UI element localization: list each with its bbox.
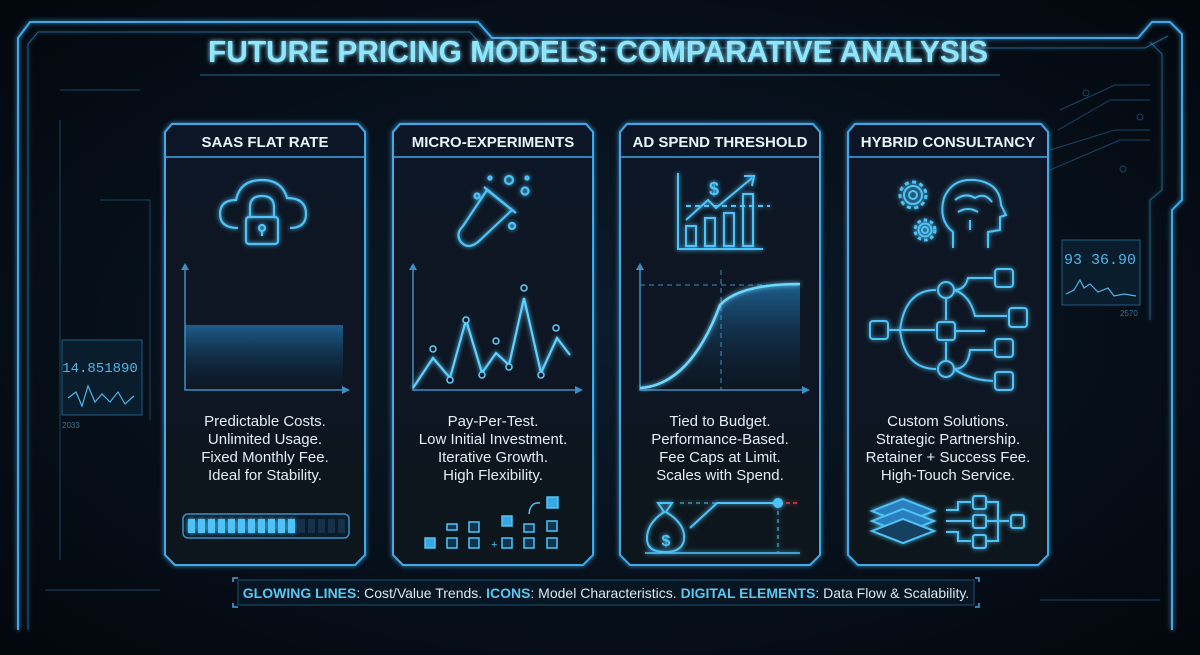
text block: Performance-Based.	[651, 431, 789, 448]
icon: test tube	[458, 176, 528, 246]
text block: Retainer + Success Fee.	[866, 449, 1030, 466]
text block	[651, 413, 789, 484]
panel: ad spend threshold	[620, 124, 820, 565]
legend: GLOWING LINES: Cost/Value Trends. ICONS: Model Characteristics. DIGITAL ELEMENTS: Data Flow & Scalability.	[243, 585, 969, 601]
text block: Unlimited Usage.	[208, 431, 322, 448]
left widget	[62, 340, 142, 430]
panel: hybrid consultancy	[848, 124, 1048, 565]
icon: growing squares: +	[491, 539, 497, 551]
text block: Scales with Spend.	[656, 467, 784, 484]
text block: Tied to Budget.	[669, 413, 771, 430]
icon: layers to flow	[872, 496, 1024, 548]
right widget	[1062, 240, 1140, 318]
flow diagram	[870, 269, 1027, 390]
chart: zigzag	[409, 263, 583, 394]
background circuitry	[45, 85, 1160, 600]
chart: flat line	[181, 263, 350, 394]
text block: Fee Caps at Limit.	[659, 449, 781, 466]
text block: Ideal for Stability.	[208, 467, 322, 484]
progress bar	[183, 514, 349, 538]
text block: High Flexibility.	[443, 467, 543, 484]
panel: micro-experiments	[393, 124, 593, 565]
icon: growing squares	[425, 497, 558, 551]
heading: MICRO-EXPERIMENTS	[412, 134, 574, 151]
chart: s-curve	[636, 263, 810, 394]
icon: money bag cap: $	[662, 533, 671, 550]
legend	[233, 578, 979, 607]
panel: saas flat rate	[165, 124, 365, 565]
right widget: 2570	[1120, 309, 1138, 318]
text block: High-Touch Service.	[881, 467, 1015, 484]
text block: Fixed Monthly Fee.	[201, 449, 329, 466]
icon: gears and brain head	[900, 180, 1006, 248]
text block: Pay-Per-Test.	[448, 413, 538, 430]
icon: money bag cap	[645, 499, 800, 553]
right widget: 93 36.90	[1064, 252, 1136, 269]
text block	[866, 413, 1030, 484]
heading: SAAS FLAT RATE	[202, 134, 328, 151]
text block	[419, 413, 567, 484]
text block: Custom Solutions.	[887, 413, 1009, 430]
left widget: 14.851890	[62, 361, 138, 377]
text block: Strategic Partnership.	[876, 431, 1020, 448]
icon: cloud lock	[220, 180, 306, 244]
heading: HYBRID CONSULTANCY	[861, 134, 1035, 151]
text block: Iterative Growth.	[438, 449, 548, 466]
icon: bar chart with dollar: $	[709, 179, 719, 199]
title: FUTURE PRICING MODELS: COMPARATIVE ANALYSIS	[208, 34, 988, 69]
icon: bar chart with dollar	[678, 173, 770, 249]
text block	[201, 413, 329, 484]
left widget: 2033	[62, 421, 80, 430]
heading: AD SPEND THRESHOLD	[632, 134, 808, 151]
text block: Predictable Costs.	[204, 413, 326, 430]
text block: Low Initial Investment.	[419, 431, 567, 448]
